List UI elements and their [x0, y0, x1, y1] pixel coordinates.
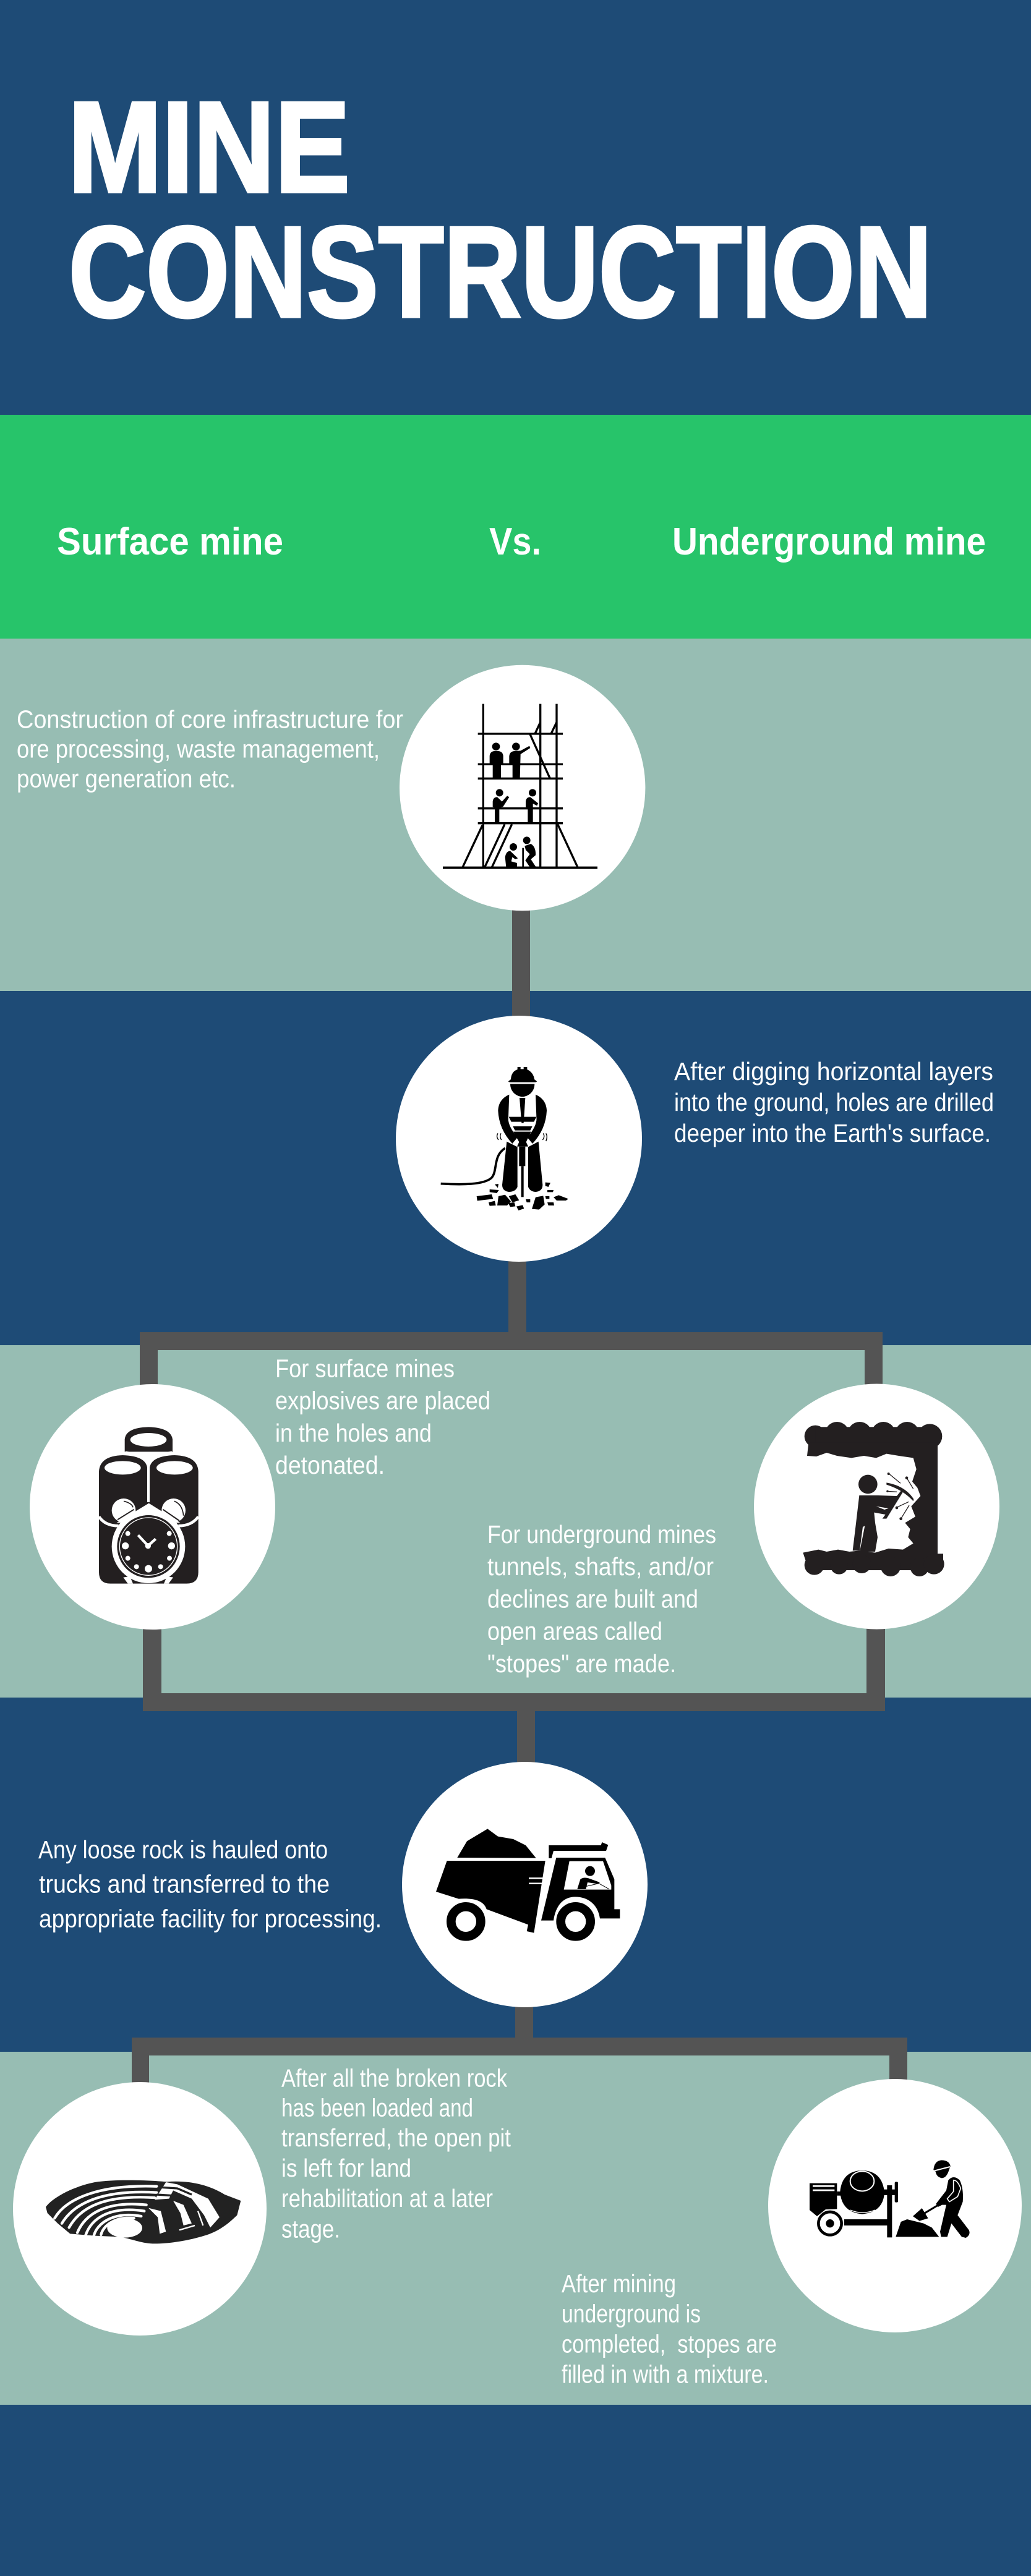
- icon: worker with jackhammer: [396, 1016, 642, 1262]
- title: [68, 75, 932, 344]
- panel: band 3: [0, 1345, 1031, 1698]
- panel: band 4: [0, 1698, 1031, 2052]
- icon: miner with pickaxe in tunnel: [754, 1384, 999, 1630]
- text: surface mine explosives: For surface mines: [275, 1354, 455, 1382]
- text: hauling rock: trucks and transferred to the: [39, 1870, 330, 1898]
- text: drilling holes: deeper into the Earth's surface.: [674, 1119, 991, 1147]
- text: hauling rock: appropriate facility for processing.: [39, 1905, 382, 1933]
- heading: comparison labels: Vs.: [489, 521, 541, 563]
- text: surface mine explosives: explosives are placed: [275, 1387, 490, 1415]
- icon: dump truck: [402, 1762, 648, 2007]
- text: stopes backfilled: filled in with a mixture.: [562, 2360, 769, 2389]
- text: open pit rehabilitation: is left for land: [281, 2154, 411, 2182]
- text: open pit rehabilitation: [281, 2064, 511, 2243]
- icon: cement mixer and worker: [768, 2079, 1022, 2332]
- text: underground tunnels: open areas called: [487, 1617, 662, 1646]
- text: stopes backfilled: After mining: [562, 2269, 676, 2298]
- text: surface mine explosives: detonated.: [275, 1451, 385, 1479]
- heading: comparison labels: [57, 521, 986, 563]
- text: drilling holes: into the ground, holes are drilled: [674, 1088, 994, 1116]
- text: stopes backfilled: underground is: [562, 2300, 701, 2328]
- text: core infrastructure: power generation etc.: [17, 764, 236, 793]
- text: open pit rehabilitation: has been loaded and: [281, 2094, 473, 2122]
- text: stopes backfilled: completed, stopes are: [562, 2330, 777, 2358]
- panel: title background: [0, 0, 1031, 415]
- text: core infrastructure: ore processing, waste management,: [17, 735, 380, 763]
- text: open pit rehabilitation: rehabilitation at a later: [281, 2184, 493, 2213]
- panel: band 2: [0, 991, 1031, 1345]
- icon: open pit: [13, 2082, 267, 2336]
- text: drilling holes: After digging horizontal layers: [674, 1057, 993, 1086]
- icon: dynamite with alarm clock: [30, 1384, 275, 1630]
- text: open pit rehabilitation: After all the broken rock: [281, 2064, 507, 2092]
- text: core infrastructure: [17, 705, 403, 793]
- icon: scaffolding with workers: [400, 665, 645, 911]
- heading: comparison labels: Underground mine: [672, 521, 986, 563]
- heading: comparison labels: Surface mine: [57, 521, 283, 563]
- panel: band 5: [0, 2052, 1031, 2405]
- text: core infrastructure: Construction of core infrastructure for: [17, 705, 403, 734]
- text: open pit rehabilitation: transferred, the open pit: [281, 2123, 511, 2152]
- flow connectors: [132, 909, 907, 2085]
- text: open pit rehabilitation: stage.: [281, 2215, 340, 2243]
- panel: comparison header band: [0, 415, 1031, 639]
- text: underground tunnels: tunnels, shafts, and/or: [487, 1552, 714, 1581]
- text: underground tunnels: "stopes" are made.: [487, 1649, 676, 1678]
- text: surface mine explosives: in the holes and: [275, 1419, 432, 1447]
- text: stopes backfilled: [562, 2269, 777, 2389]
- panel: band 1: [0, 639, 1031, 991]
- text: drilling holes: [674, 1057, 994, 1147]
- panel: footer band: [0, 2405, 1031, 2576]
- text: underground tunnels: declines are built and: [487, 1584, 698, 1613]
- text: hauling rock: Any loose rock is hauled onto: [38, 1835, 328, 1864]
- text: hauling rock: [38, 1835, 382, 1933]
- text: underground tunnels: For underground mines: [487, 1520, 716, 1549]
- text: underground tunnels: [487, 1520, 716, 1678]
- text: surface mine explosives: [275, 1354, 490, 1479]
- title: MINE: [68, 75, 350, 219]
